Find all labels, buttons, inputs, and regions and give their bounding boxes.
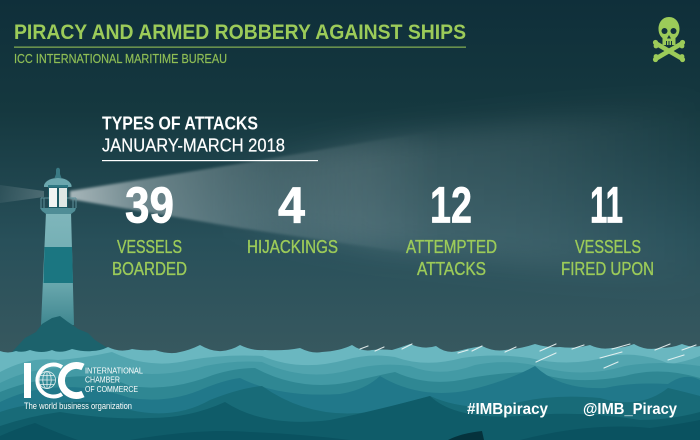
wave layer 5 <box>0 366 700 440</box>
wave layer 7 <box>0 396 700 440</box>
icon: skull and crossbones <box>653 17 685 62</box>
finial <box>54 168 62 178</box>
light beam <box>0 100 700 285</box>
stat: attempted attacks <box>406 176 497 279</box>
waves <box>0 344 700 440</box>
tagline: The world business organization <box>24 401 132 412</box>
rock <box>12 316 116 354</box>
stat: vessels fired upon: FIRED UPON <box>561 259 654 279</box>
label: VESSELS <box>117 237 182 257</box>
logo wordmark <box>85 366 143 394</box>
hashtag: #IMBpiracy <box>467 401 548 418</box>
letter I <box>24 363 31 398</box>
title block <box>14 19 466 66</box>
stat: attempted attacks: ATTACKS <box>417 259 486 279</box>
tower <box>41 212 74 325</box>
label: VESSELS <box>575 237 641 257</box>
stat: vessels boarded <box>112 176 187 279</box>
section heading <box>102 112 318 161</box>
label: HIJACKINGS <box>247 237 338 257</box>
heading line: period: JANUARY-MARCH 2018 <box>102 136 285 156</box>
lighthouse <box>12 168 116 354</box>
first C <box>37 364 62 396</box>
logo wordmark: CHAMBER <box>85 374 120 384</box>
number 39: 39 <box>125 176 174 234</box>
number 11: 11 <box>590 176 623 234</box>
heading line: types of attacks: TYPES OF ATTACKS <box>102 112 258 134</box>
label: ATTEMPTED <box>406 237 497 257</box>
stat: hijackings <box>247 176 338 257</box>
second C <box>61 366 83 396</box>
dark hollow <box>448 431 484 440</box>
twitter handle: @IMB_Piracy <box>583 401 677 418</box>
wave layer 6 <box>0 386 700 440</box>
lantern room <box>48 187 68 208</box>
gallery <box>41 198 76 208</box>
wave layer 3 <box>0 362 700 440</box>
subtitle: ICC INTERNATIONAL MARITIME BUREAU <box>14 52 227 66</box>
dome <box>44 178 72 187</box>
number 12: 12 <box>430 176 472 234</box>
tower dark band <box>44 247 73 283</box>
ICC logo <box>24 363 143 412</box>
stat: vessels fired upon <box>561 176 654 279</box>
wave layer 1 <box>0 344 700 440</box>
foam <box>360 344 696 368</box>
title: PIRACY AND ARMED ROBBERY AGAINST SHIPS <box>14 19 466 44</box>
wave layer 8 <box>0 420 700 440</box>
wave layer 4 <box>0 368 700 440</box>
wave layer 2 <box>0 352 700 440</box>
logo wordmark: OF COMMERCE <box>85 384 138 394</box>
globe <box>38 372 56 388</box>
number 4: 4 <box>278 176 306 234</box>
heading rule <box>102 160 318 161</box>
title rule <box>14 46 466 48</box>
stat: vessels boarded: BOARDED <box>112 259 187 279</box>
logo wordmark: INTERNATIONAL <box>85 366 143 376</box>
